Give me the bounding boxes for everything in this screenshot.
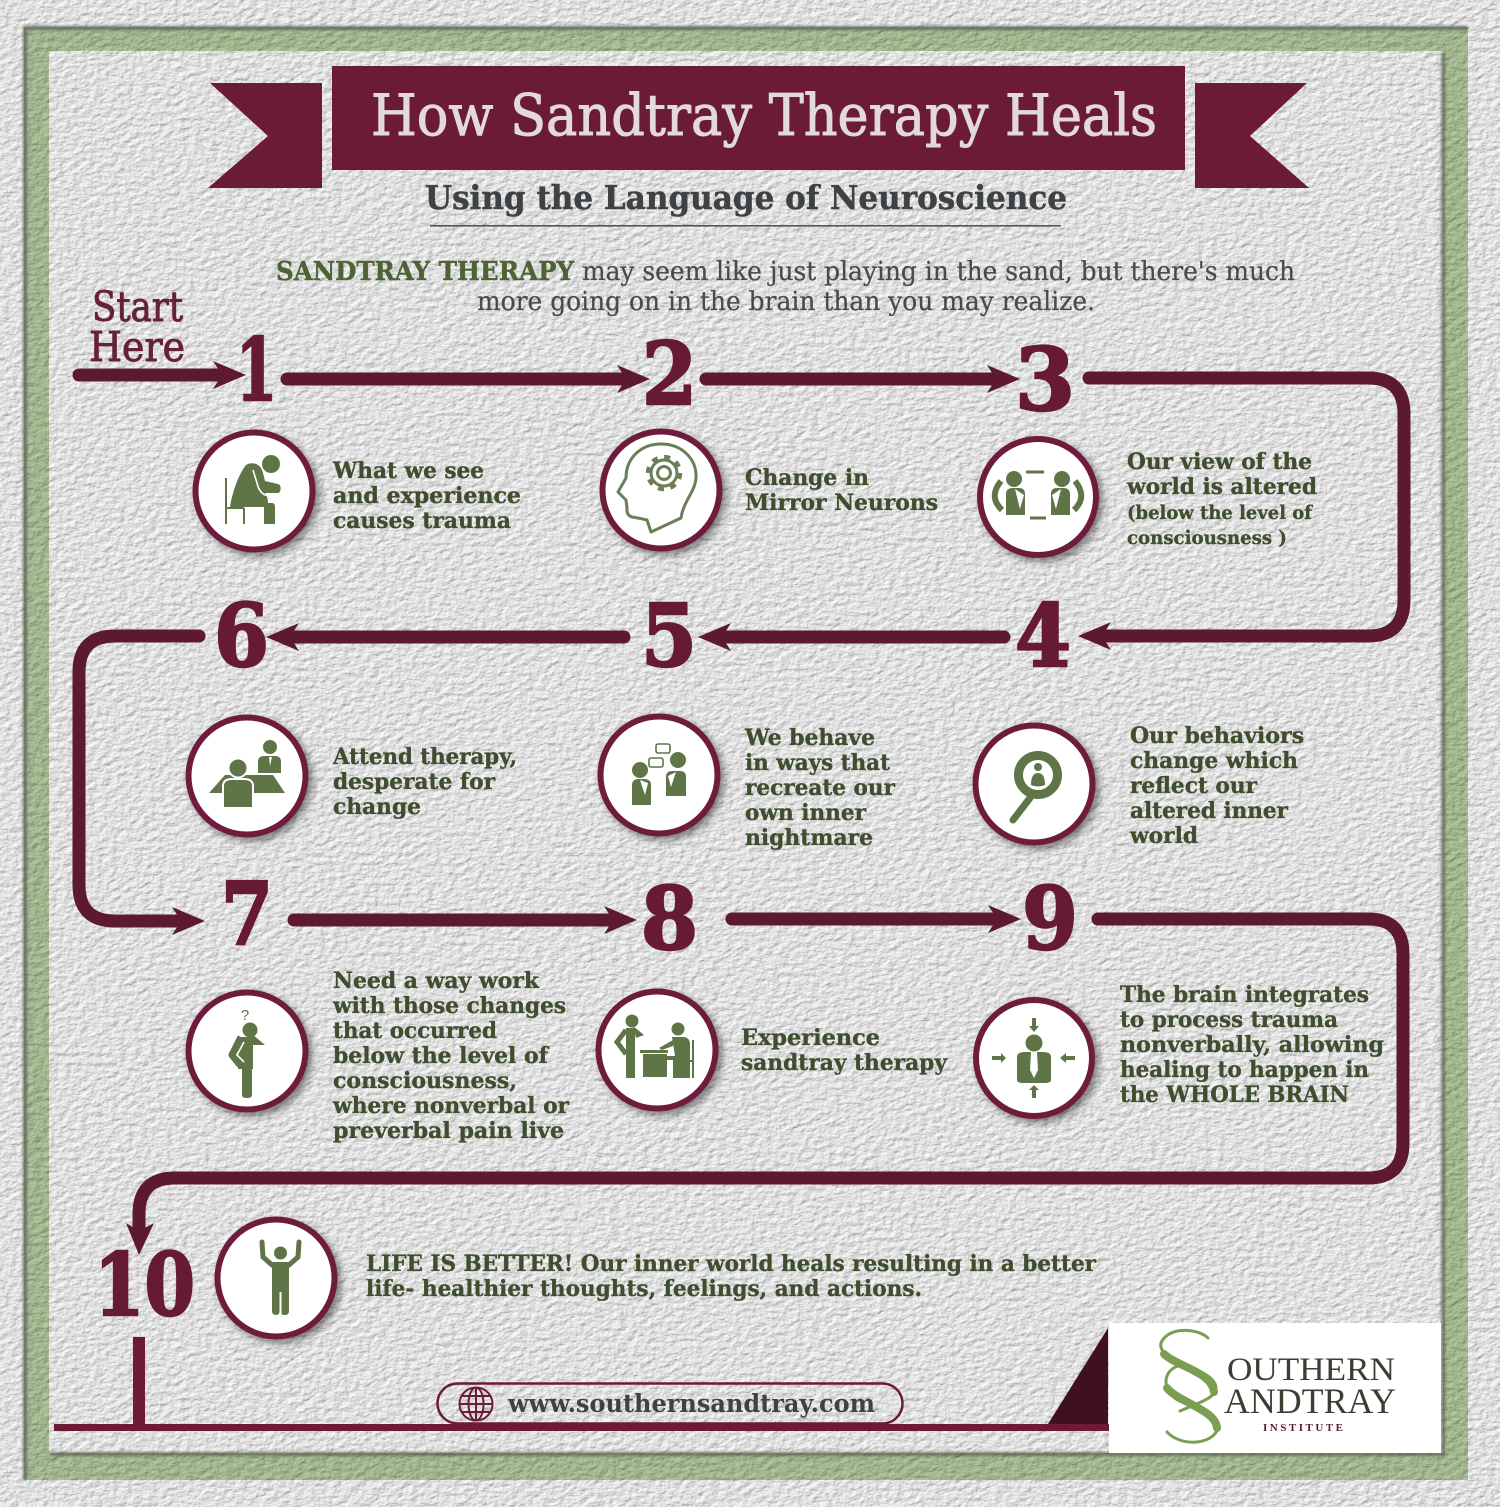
intro text: may seem like just playing in the sand, but there's much — [582, 257, 1295, 287]
icon: client and therapist at desk — [598, 992, 716, 1108]
icon: confused person with question mark — [188, 992, 306, 1110]
arrow: 3 to 4 — [1078, 378, 1404, 650]
logo mark — [1161, 1330, 1218, 1442]
step 7 — [188, 864, 569, 1144]
step 3 text: world is altered — [1126, 474, 1317, 500]
icon: magnifying glass over person — [976, 726, 1092, 842]
step 8 text — [741, 1025, 948, 1076]
step 7 text: preverbal pain live — [333, 1118, 564, 1144]
step 1 text: and experience — [333, 483, 521, 509]
icon: confused person with question mark: ? — [241, 1007, 249, 1024]
step 5 text: recreate our — [745, 775, 895, 801]
icon: person with arrows pointing in — [976, 1000, 1092, 1116]
footer baseline — [54, 1337, 1109, 1431]
step 1 — [196, 320, 521, 550]
step 1 text: What we see — [332, 458, 484, 484]
step 7 text: where nonverbal or — [332, 1093, 569, 1119]
title box — [332, 66, 1185, 170]
step 10 text: LIFE IS BETTER! Our inner world heals resulting in a better — [366, 1251, 1096, 1277]
step 4 text: Our behaviors — [1130, 723, 1304, 749]
logo wordmark: ANDTRAY — [1224, 1381, 1396, 1421]
step 7 text: Need a way work — [333, 968, 540, 994]
step 1 text — [332, 458, 521, 534]
step 7 text: below the level of — [333, 1043, 550, 1069]
step 4 — [976, 586, 1304, 849]
arrow: start to 1 — [79, 361, 246, 389]
step 7 text: consciousness, — [333, 1068, 517, 1094]
step 7 text: with those changes — [332, 993, 566, 1019]
number 9: 9 — [1022, 869, 1078, 970]
step 9 text: The brain integrates — [1120, 982, 1369, 1008]
arrow: 6 to 7 — [79, 636, 205, 935]
step 3 text: (below the level of — [1127, 502, 1314, 524]
icon: meeting across a desk — [188, 718, 306, 834]
intro text: SANDTRAY THERAPY — [276, 257, 574, 287]
step 3 text — [1126, 449, 1317, 549]
step 5 text — [744, 725, 895, 851]
step 3 text: Our view of the — [1127, 449, 1312, 475]
icon: person sitting with head down — [196, 432, 312, 550]
step 5 text: nightmare — [745, 825, 873, 851]
start here label — [89, 283, 185, 371]
step 5 text: own inner — [745, 800, 866, 826]
logo wordmark — [1224, 1352, 1396, 1434]
step 3 text: consciousness ) — [1127, 527, 1287, 549]
number 2: 2 — [642, 324, 697, 425]
arrow: 7 to 8 — [294, 906, 637, 934]
arrow: 5 to 6 — [266, 623, 624, 651]
icon: two people talking — [600, 716, 718, 834]
step 4 text: change which — [1130, 748, 1298, 774]
number 7: 7 — [221, 864, 273, 965]
number 4: 4 — [1015, 586, 1071, 687]
step 2 text — [745, 465, 938, 516]
logo wordmark: OUTHERN — [1227, 1352, 1395, 1388]
title: How Sandtray Therapy Heals — [371, 83, 1157, 149]
number 10: 10 — [94, 1235, 195, 1336]
right ribbon — [1195, 83, 1309, 188]
step 10 — [94, 1220, 1096, 1336]
step 4 text: altered inner — [1130, 798, 1288, 824]
dark corner triangle — [1048, 1328, 1108, 1424]
step 2 text: Mirror Neurons — [745, 490, 938, 516]
step 8 text: sandtray therapy — [741, 1050, 948, 1076]
arrow: 2 to 3 — [706, 365, 1020, 393]
logo panel — [1048, 1323, 1441, 1453]
step 4 text — [1129, 723, 1304, 849]
number 3: 3 — [1015, 330, 1075, 431]
step 10 text: life- healthier thoughts, feelings, and actions. — [366, 1276, 922, 1302]
step 7 text: that occurred — [333, 1018, 497, 1044]
website pill — [438, 1384, 902, 1424]
step 4 text: world — [1129, 823, 1198, 849]
step 7 text — [332, 968, 569, 1144]
number 8: 8 — [641, 869, 698, 970]
step 6 text — [332, 744, 517, 820]
title banner — [208, 66, 1309, 188]
arrow: 4 to 5 — [698, 623, 1004, 651]
step 6 text: desperate for — [333, 769, 495, 795]
icon: globe — [460, 1388, 492, 1420]
icon: person raising arms — [218, 1220, 334, 1336]
step 9 text: to process trauma — [1120, 1007, 1338, 1033]
start here label: Here — [89, 323, 185, 371]
step 8 text: Experience — [741, 1025, 880, 1051]
left ribbon — [208, 83, 322, 188]
step 8 — [598, 869, 948, 1108]
step 10 text — [366, 1251, 1096, 1302]
step 6 text: Attend therapy, — [332, 744, 517, 770]
intro text: more going on in the brain than you may realize. — [477, 287, 1095, 317]
step 6 — [188, 586, 517, 834]
arrow: 8 to 9 — [732, 905, 1021, 933]
step 4 text: reflect our — [1130, 773, 1257, 799]
step 5 — [600, 586, 895, 851]
step 5 text: in ways that — [745, 750, 891, 776]
icon: two people in a cycle — [980, 439, 1096, 555]
step 3 — [980, 330, 1317, 555]
step 2 text: Change in — [745, 465, 869, 491]
start here label: Start — [92, 283, 183, 331]
step 9 text: the WHOLE BRAIN — [1120, 1082, 1349, 1108]
arrow: 1 to 2 — [287, 365, 650, 393]
step 1 text: causes trauma — [333, 508, 511, 534]
step 9 text: nonverbally, allowing — [1120, 1032, 1384, 1058]
step 9 — [976, 869, 1384, 1116]
step 5 text: We behave — [744, 725, 875, 751]
logo wordmark: INSTITUTE — [1263, 1422, 1343, 1434]
step 9 text: healing to happen in — [1120, 1057, 1369, 1083]
website url: www.southernsandtray.com — [507, 1389, 875, 1418]
step 6 text: change — [333, 794, 421, 820]
arrow: 9 to 10 — [126, 919, 1403, 1255]
number 6: 6 — [214, 586, 269, 687]
number 1: 1 — [236, 320, 277, 421]
step 9 text — [1120, 982, 1384, 1108]
step 2 — [602, 324, 938, 548]
number 5: 5 — [641, 586, 697, 687]
icon: head with gear — [602, 432, 720, 548]
intro text — [276, 257, 1295, 317]
subtitle: Using the Language of Neuroscience — [425, 178, 1067, 217]
